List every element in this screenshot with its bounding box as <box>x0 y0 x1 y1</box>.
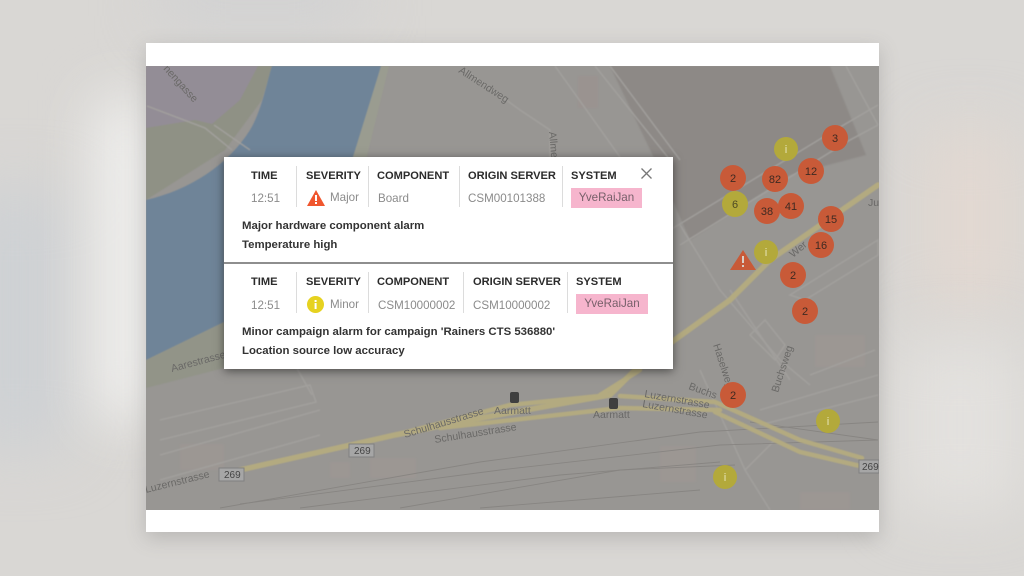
map: street labels: Schulhausstrasse <box>434 421 517 446</box>
map: street labels: Wer <box>787 239 810 260</box>
alarm row 1: ORIGIN SERVER <box>468 170 556 182</box>
map: street labels: Aarestrasse <box>170 349 227 375</box>
red cluster markers: 82 <box>769 174 781 186</box>
alarm row 2: SYSTEM <box>576 276 622 288</box>
red cluster markers: 2 <box>802 306 808 318</box>
yellow info markers <box>713 137 840 489</box>
alarm row 1 <box>242 166 652 251</box>
yellow info markers: i <box>784 144 788 156</box>
red cluster markers: 38 <box>761 206 773 218</box>
alarm row 2: CSM10000002 <box>473 299 550 312</box>
map: street labels: Schulhausstrasse <box>402 405 485 441</box>
alarm row 2: Minor <box>330 298 359 311</box>
red cluster markers <box>720 125 848 408</box>
alarm row 1: SYSTEM <box>571 170 617 182</box>
alarm row 1: SEVERITY <box>306 170 361 182</box>
map: street labels: Aarmatt <box>593 409 630 421</box>
tag: YveRaiJan <box>584 297 640 310</box>
alarm row 1: Temperature high <box>242 239 337 251</box>
red cluster markers: 3 <box>832 133 838 145</box>
red cluster markers: 41 <box>785 201 797 213</box>
tag: YveRaiJan <box>579 191 634 204</box>
map: road shields: 269 <box>224 470 241 481</box>
map: street labels: Luzernstrasse <box>643 388 711 411</box>
map: rail tracks <box>220 422 878 508</box>
map: buildings <box>180 66 866 510</box>
icon: close <box>641 168 652 179</box>
tag <box>571 188 642 208</box>
map: main roads <box>240 185 878 470</box>
headers: TIME <box>251 276 278 288</box>
red cluster markers: 2 <box>790 270 796 282</box>
map: street labels: Buchsweg <box>769 344 796 394</box>
yellow info markers: i <box>723 472 727 484</box>
map: street labels <box>144 63 879 496</box>
values: 12:51 <box>251 299 280 312</box>
message: Minor campaign alarm for campaign 'Rainers CTS 536880' <box>242 326 555 338</box>
alarm row 2 <box>242 272 648 357</box>
alarm row 1: Major <box>330 191 359 204</box>
yellow info markers: i <box>764 247 768 259</box>
alarm row 2: Location source low accuracy <box>242 345 405 357</box>
alarm row 2: CSM10000002 <box>378 299 455 312</box>
values: 12:51 <box>251 192 280 205</box>
yellow info markers: 6 <box>732 199 738 211</box>
map <box>146 66 879 510</box>
popup <box>224 157 673 369</box>
icon: minor info <box>307 296 324 313</box>
alarm row 1: CSM00101388 <box>468 192 545 205</box>
white card <box>146 43 879 532</box>
divider <box>224 262 673 264</box>
message: Major hardware component alarm <box>242 220 424 232</box>
map: minor roads <box>147 66 878 510</box>
map: street labels: Aarmatt <box>494 405 531 417</box>
alarm row 2: COMPONENT <box>377 276 449 288</box>
icon: bus stops <box>510 392 618 409</box>
map: road shields: 269 <box>862 462 879 473</box>
alarm row 1: Board <box>378 192 409 205</box>
red cluster markers: 16 <box>815 240 827 252</box>
icon: map warning triangle <box>730 250 756 270</box>
map: street labels: Luzernstrasse <box>641 398 709 421</box>
map: street labels: Haselweg <box>710 342 736 390</box>
icon: major triangle <box>307 190 325 206</box>
red cluster markers: 15 <box>825 214 837 226</box>
red cluster markers: 2 <box>730 173 736 185</box>
map: street labels: Ju <box>868 197 879 209</box>
map: road shields <box>219 444 879 481</box>
map: road shields: 269 <box>354 446 371 457</box>
headers: TIME <box>251 170 278 182</box>
red cluster markers: 2 <box>730 390 736 402</box>
alarm row 2: ORIGIN SERVER <box>473 276 561 288</box>
map: park and water <box>146 66 389 388</box>
map: street labels: Allmen <box>546 131 561 164</box>
yellow info markers: i <box>826 416 830 428</box>
map: street labels: Buchs <box>687 381 719 402</box>
alarm row 2: SEVERITY <box>306 276 361 288</box>
alarm row 1: COMPONENT <box>377 170 449 182</box>
red cluster markers: 12 <box>805 166 817 178</box>
tag <box>576 294 648 314</box>
